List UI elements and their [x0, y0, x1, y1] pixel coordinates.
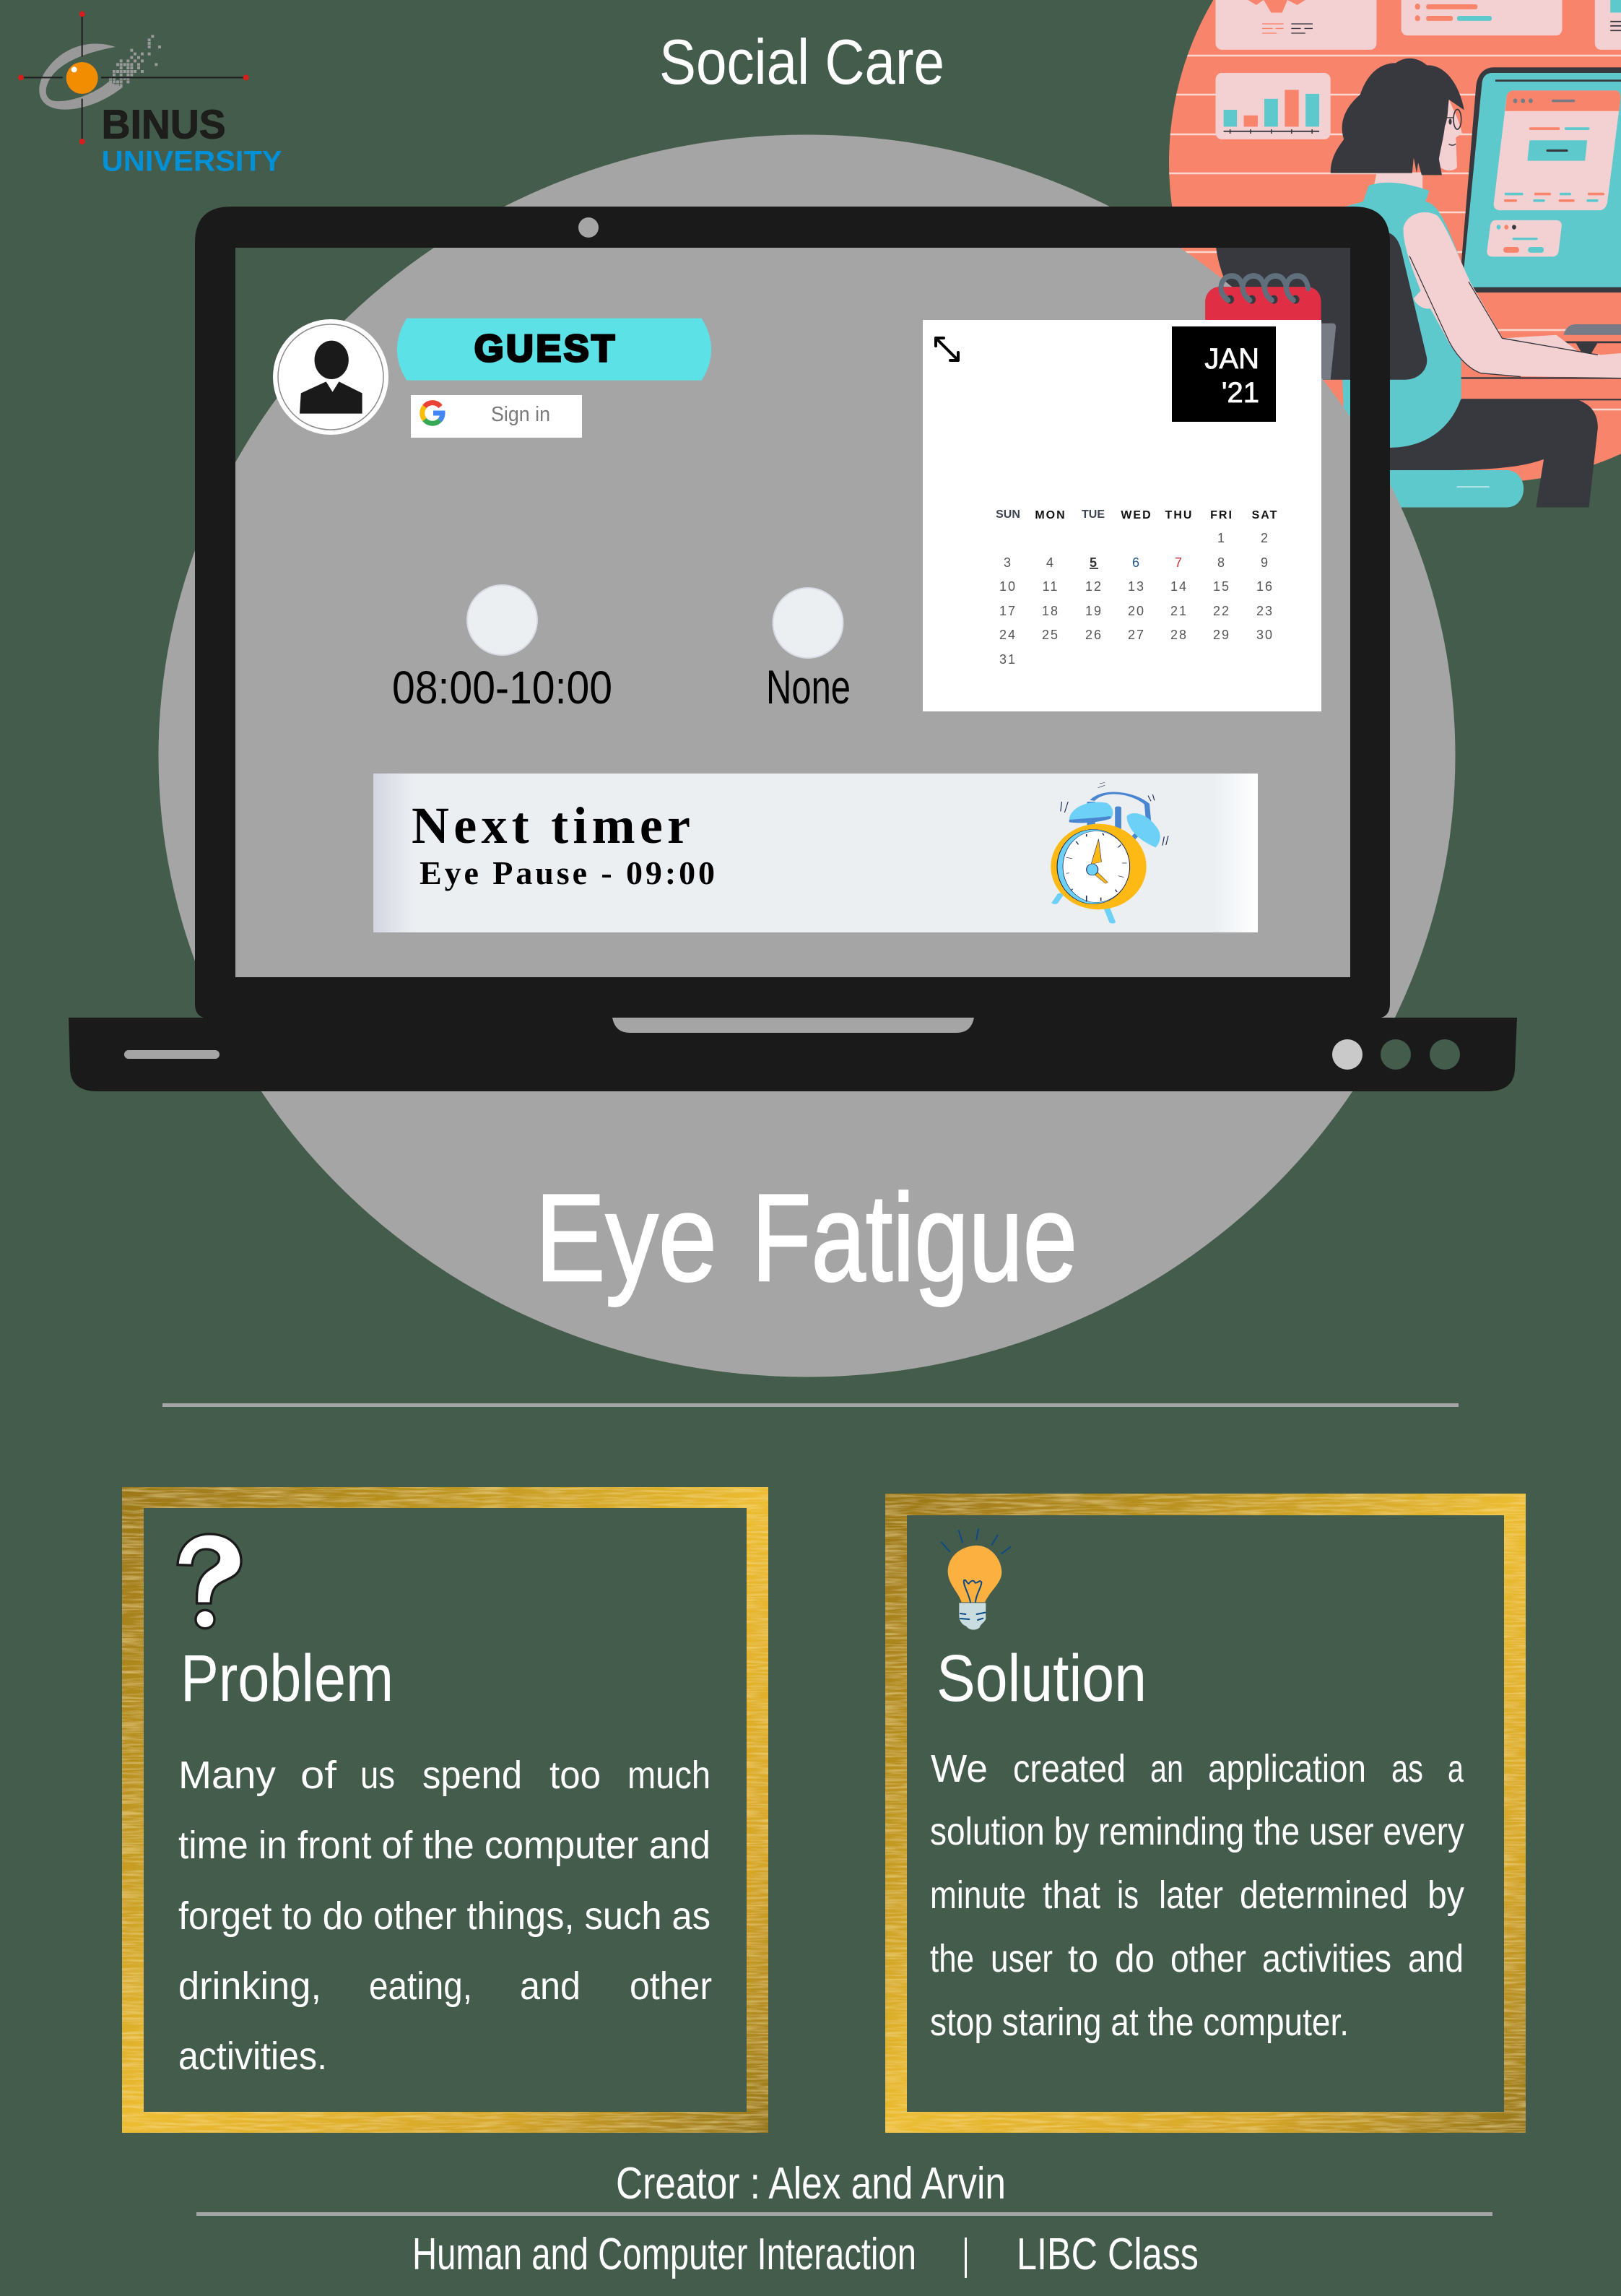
- speaker slot: [124, 1050, 220, 1059]
- trackpad notch: [612, 1018, 974, 1033]
- solution text: application: [1208, 1747, 1366, 1790]
- dates: 2: [1261, 531, 1269, 545]
- crosshair: [21, 14, 246, 142]
- laptop: [69, 207, 1517, 1091]
- solution text: an: [1150, 1747, 1183, 1790]
- problem text: too: [549, 1754, 601, 1797]
- dates: 29: [1213, 628, 1230, 642]
- calendar: [923, 276, 1321, 711]
- solution text: other: [1170, 1937, 1246, 1980]
- heading: Social Care: Social Care: [659, 26, 944, 98]
- weekday header: THU: [1165, 509, 1193, 521]
- solution text: activities: [1262, 1937, 1391, 1980]
- woman figure: [1216, 59, 1621, 507]
- expand arrow: [936, 338, 958, 360]
- logo: BINUS University: [18, 11, 282, 178]
- solution text: as: [1391, 1747, 1423, 1790]
- dashboard panels behind woman: [1216, 0, 1621, 139]
- dates: 31: [999, 652, 1017, 667]
- problem text: spend: [422, 1754, 522, 1797]
- dates: 6: [1132, 555, 1141, 570]
- solution text: is: [1117, 1873, 1139, 1917]
- timer button: 08:00-10:00: [392, 585, 612, 714]
- dates: 1: [1217, 531, 1226, 545]
- dates: 25: [1042, 628, 1059, 642]
- solution text: the: [930, 1937, 974, 1980]
- dates: 24: [999, 628, 1017, 642]
- problem text: and: [520, 1964, 581, 2008]
- solution text: created: [1013, 1747, 1126, 1790]
- timer button: None: [766, 588, 851, 714]
- timer button: None: None: [766, 660, 851, 714]
- problem text: time in front of the computer and: [178, 1824, 710, 1867]
- month block: JAN: [1204, 343, 1259, 375]
- solution text: do: [1115, 1937, 1155, 1980]
- calendar binding: [1205, 276, 1321, 320]
- timer button: 08:00-10:00: 08:00-10:00: [392, 662, 612, 714]
- main title: Eye Fatigue: Eye: [535, 1169, 717, 1307]
- dates: 7: [1175, 555, 1183, 570]
- solution text: user: [991, 1937, 1053, 1980]
- heading: Solution: Solution: [936, 1642, 1147, 1715]
- gold frame: problem: [122, 1487, 768, 2133]
- dates: 13: [1128, 579, 1145, 594]
- dates: 11: [1043, 579, 1059, 594]
- dates: 26: [1085, 628, 1103, 642]
- month block: [1172, 326, 1276, 422]
- solution text: minute: [930, 1873, 1026, 1917]
- dates: 12: [1085, 579, 1103, 594]
- solution text: by: [1427, 1873, 1464, 1917]
- logo wordmark BINUS: BINUS: [102, 103, 226, 148]
- problem text: of: [300, 1754, 337, 1797]
- illustration: woman working at computer: [1155, 0, 1621, 507]
- weekday header: SUN: [996, 508, 1020, 521]
- monitor: [1459, 67, 1621, 293]
- solution text: stop staring at the computer.: [930, 2001, 1349, 2044]
- dates: 9: [1261, 555, 1269, 570]
- weekday header: [996, 508, 1278, 521]
- dates: 30: [1256, 628, 1274, 642]
- month block: '21: [1222, 377, 1259, 409]
- solution text: solution by reminding the user every: [930, 1810, 1464, 1853]
- dates: 23: [1256, 604, 1274, 618]
- solution text: a: [1448, 1747, 1464, 1790]
- main title: Eye Fatigue: [535, 1169, 1077, 1307]
- problem text: other: [630, 1964, 712, 2008]
- dates: 5: [1090, 555, 1098, 570]
- next timer panel: Next timer: [412, 797, 690, 854]
- solution text: determined: [1240, 1873, 1408, 1917]
- guest name bar: GUEST: [474, 328, 614, 370]
- problem text: Many: [178, 1754, 276, 1797]
- weekday header: TUE: [1082, 508, 1105, 521]
- dates: 16: [1256, 579, 1274, 594]
- webcam: [578, 217, 599, 238]
- next timer panel: Eye Pause - 09:00: [420, 854, 715, 891]
- dates: 4: [1046, 555, 1055, 570]
- dates: 21: [1170, 604, 1188, 618]
- guest name bar: [397, 319, 711, 381]
- dates: 10: [999, 579, 1017, 594]
- dates: 28: [1170, 628, 1188, 642]
- laptop screen bezel: [195, 207, 1390, 1018]
- icon: light bulb: [942, 1529, 1010, 1630]
- gold frame: solution: [885, 1494, 1526, 2133]
- google sign in button: [411, 395, 582, 438]
- laptop base: [69, 1018, 1517, 1091]
- weekday header: FRI: [1210, 509, 1233, 521]
- problem text: activities.: [178, 2035, 327, 2078]
- eye swoosh: [39, 43, 123, 110]
- logo wordmark UNIVERSITY: UNIVERSITY: [102, 146, 282, 178]
- dates: 15: [1213, 579, 1230, 594]
- panel: problem: [122, 1487, 768, 2133]
- orange pupil: [66, 62, 98, 94]
- problem text: much: [627, 1754, 710, 1797]
- footer: creators: Creator : Alex and Arvin: [616, 2159, 1006, 2209]
- footer: course and class: Human and Computer Interaction: [412, 2230, 916, 2279]
- solution text: and: [1408, 1937, 1464, 1980]
- weekday header: MON: [1035, 509, 1066, 521]
- crosshair dots: [18, 11, 249, 144]
- google sign in button: Sign in: [491, 403, 550, 426]
- footer: course and class: LIBC Class: [1017, 2230, 1199, 2279]
- solution text: [930, 1747, 1464, 2044]
- solution text: later: [1159, 1873, 1223, 1917]
- desk and keyboard: [1452, 324, 1621, 399]
- problem text: forget to do other things, such as: [178, 1894, 710, 1938]
- problem text: [178, 1754, 712, 2078]
- dates: 22: [1213, 604, 1230, 618]
- problem text: eating,: [369, 1964, 472, 2008]
- weekday header: SAT: [1252, 509, 1278, 521]
- avatar: [273, 319, 388, 435]
- pixel squares: [109, 35, 161, 87]
- solution text: to: [1068, 1937, 1098, 1980]
- solution text: We: [931, 1747, 988, 1790]
- problem text: drinking,: [178, 1964, 321, 2008]
- dates: [999, 531, 1274, 667]
- dates: 14: [1170, 579, 1188, 594]
- next timer panel: [373, 774, 1258, 932]
- weekday header: WED: [1121, 509, 1152, 521]
- bar chart panel: [1224, 90, 1319, 134]
- icon: question mark: [178, 1534, 241, 1629]
- big grey circle: [159, 134, 1456, 1377]
- icon: alarm clock: [1051, 782, 1168, 922]
- calendar sheet: [923, 320, 1321, 711]
- main title: Eye Fatigue: Fatigue: [752, 1169, 1077, 1307]
- problem text: us: [360, 1754, 395, 1797]
- dates: 27: [1128, 628, 1145, 642]
- dates: 3: [1004, 555, 1012, 570]
- dates: 18: [1042, 604, 1059, 618]
- dates: 20: [1128, 604, 1145, 618]
- dates: 8: [1217, 555, 1226, 570]
- heading: Problem: Problem: [181, 1642, 394, 1715]
- solution text: that: [1043, 1873, 1100, 1917]
- dates: 19: [1085, 604, 1103, 618]
- dates: 17: [999, 604, 1017, 618]
- status lights: [1332, 1039, 1460, 1070]
- panel: solution: [885, 1494, 1526, 2133]
